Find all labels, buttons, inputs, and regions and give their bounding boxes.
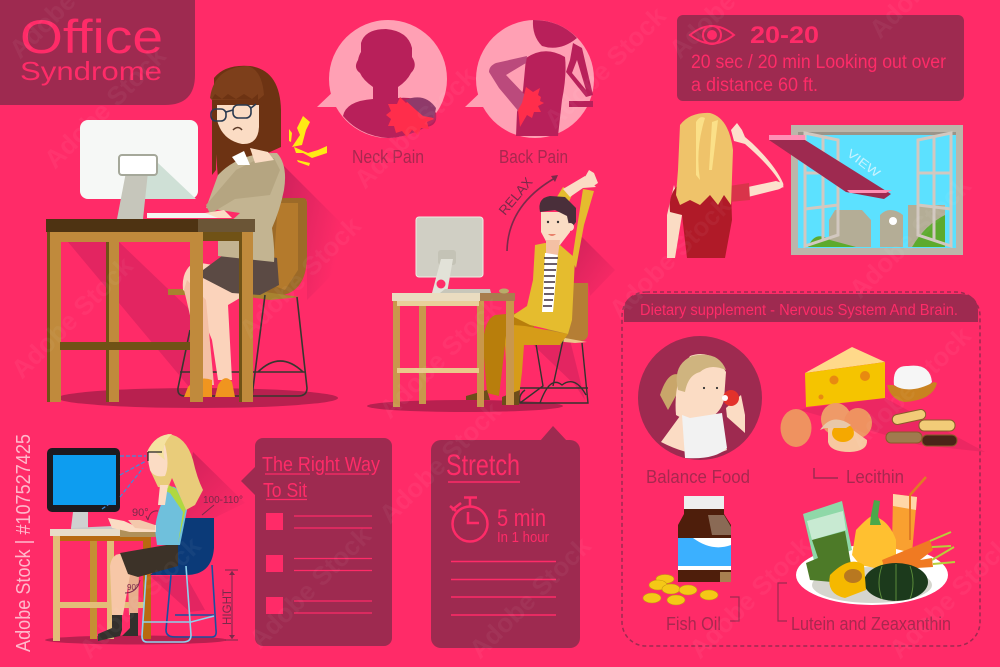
raised arms <box>572 189 594 268</box>
peanuts <box>886 409 957 446</box>
chair <box>520 283 588 403</box>
neck pain callout: Neck Pain <box>352 147 424 167</box>
posture annotations: 100-110° <box>203 495 243 506</box>
eggs <box>780 409 812 447</box>
panel: dietary supplement <box>622 292 985 646</box>
woman figure <box>183 66 285 397</box>
stock watermarks: Adobe Stock <box>373 395 507 529</box>
broccoli <box>806 531 852 582</box>
blonde woman <box>667 113 783 258</box>
panel: stretch <box>431 426 580 648</box>
socks and shoes <box>98 613 138 641</box>
man figure <box>466 170 598 405</box>
near leg <box>505 325 568 396</box>
panel: the right way to sit: To Sit <box>263 480 307 502</box>
far shin <box>128 570 139 615</box>
balance food portrait <box>638 336 762 487</box>
head <box>541 212 572 245</box>
stock watermarks: Adobe Stock <box>843 320 977 454</box>
panel: stretch: In 1 hour <box>497 529 549 546</box>
keyboard <box>147 213 218 218</box>
panel: the right way to sit <box>241 438 392 646</box>
bottle <box>678 496 731 582</box>
striped shirt <box>542 253 558 312</box>
posture annotations <box>125 495 243 640</box>
watermark credit: Adobe Stock | #107527425 <box>13 434 35 652</box>
floor shadow <box>58 388 338 408</box>
hair and face <box>150 434 203 510</box>
stock watermarks: Adobe Stock <box>463 530 597 664</box>
lutein and zeaxanthin foods <box>778 477 955 634</box>
dietary heading <box>624 294 978 322</box>
stock watermarks: Adobe Stock <box>843 170 977 304</box>
neck pain callout <box>317 20 447 167</box>
posture annotations: 90° <box>127 583 139 592</box>
monitor <box>416 217 491 293</box>
icon: neck pain silhouette <box>343 29 436 138</box>
illustration: correct sitting posture <box>45 434 245 644</box>
desk <box>392 288 515 407</box>
illustration: woman with neck pain at desk <box>46 66 345 408</box>
posture annotations: 90° <box>132 507 149 519</box>
stock watermarks: Adobe Stock <box>38 40 172 174</box>
panel: stretch: 5 min <box>497 505 546 532</box>
pepper <box>852 516 896 570</box>
monitor <box>80 120 198 219</box>
bowl <box>894 366 932 393</box>
open window panes <box>805 133 951 246</box>
stock watermarks: Adobe Stock <box>5 250 139 384</box>
window <box>791 125 963 255</box>
capsules <box>643 574 718 605</box>
arrow: view: VIEW <box>844 146 884 181</box>
posture annotations: HIGHT <box>222 589 234 625</box>
desk <box>46 219 255 402</box>
lecithin foods: Lecithin <box>846 467 904 487</box>
orange juice <box>892 494 917 553</box>
back pain callout: Back Pain <box>499 147 568 167</box>
arrow: relax arc <box>496 175 558 251</box>
balance food portrait: Balance Food <box>646 467 750 487</box>
checklist <box>266 513 372 614</box>
icon: stopwatch <box>450 498 488 542</box>
fish oil: Fish Oil <box>666 614 721 634</box>
chair <box>139 518 216 642</box>
stock watermarks: Adobe Stock <box>233 210 367 344</box>
pain bolts <box>289 116 327 166</box>
20-20 info panel <box>677 15 964 101</box>
squash <box>829 562 866 598</box>
stock watermarks: Adobe Stock <box>243 520 377 654</box>
fish oil <box>643 496 739 634</box>
near shin <box>110 554 130 615</box>
dietary heading: Dietary supplement - Nervous System And Brain. <box>640 302 958 319</box>
20-20 info panel: 20 sec / 20 min Looking out over <box>691 52 947 73</box>
long shadow <box>182 452 245 518</box>
plate <box>796 545 948 605</box>
icon: back pain silhouette <box>533 20 577 48</box>
lutein and zeaxanthin foods: Lutein and Zeaxanthin <box>791 614 951 634</box>
green drink <box>803 501 852 565</box>
stock watermarks: Adobe Stock <box>348 60 482 194</box>
carrots <box>882 540 933 570</box>
stock watermarks: Adobe Stock <box>373 290 507 424</box>
arrow: view <box>769 135 892 199</box>
long shadow <box>68 242 190 388</box>
stock watermarks: Adobe Stock <box>683 530 817 664</box>
raised arm <box>731 123 783 197</box>
heading: The Right Way <box>262 454 380 476</box>
back pain callout <box>465 20 594 167</box>
stock watermarks: Adobe Stock <box>73 530 207 664</box>
cheese <box>805 347 885 407</box>
20-20 info panel: 20-20 <box>750 22 819 49</box>
arrow: relax arc: RELAX <box>496 175 536 218</box>
title panel <box>0 0 195 105</box>
icon: eye <box>690 26 734 44</box>
lecithin foods <box>780 347 985 487</box>
skirt <box>120 543 178 577</box>
floor shadow <box>367 400 563 412</box>
title: Office: Office <box>20 10 163 63</box>
far leg <box>483 312 535 396</box>
illustration: woman looking out the window <box>667 113 963 258</box>
long shadow <box>570 233 615 296</box>
lecithin bracket <box>814 468 838 478</box>
shoes <box>184 378 235 397</box>
stock watermarks: Adobe Stock <box>538 0 672 134</box>
glasses <box>211 104 256 121</box>
floor shadow <box>45 636 227 644</box>
pumpkin <box>864 563 928 601</box>
illustration: man stretching at desk <box>367 170 615 412</box>
desk <box>50 529 156 641</box>
sight lines <box>102 456 146 509</box>
monitor <box>47 448 133 529</box>
20-20 info panel: a distance 60 ft. <box>691 75 818 96</box>
stock watermarks: Adobe Stock <box>603 190 737 324</box>
subtitle: Syndrome: Syndrome <box>20 56 162 86</box>
chair <box>168 198 307 396</box>
top <box>155 487 187 545</box>
seated woman <box>98 434 203 641</box>
torso jacket <box>512 243 575 334</box>
heading: Stretch <box>446 449 520 482</box>
